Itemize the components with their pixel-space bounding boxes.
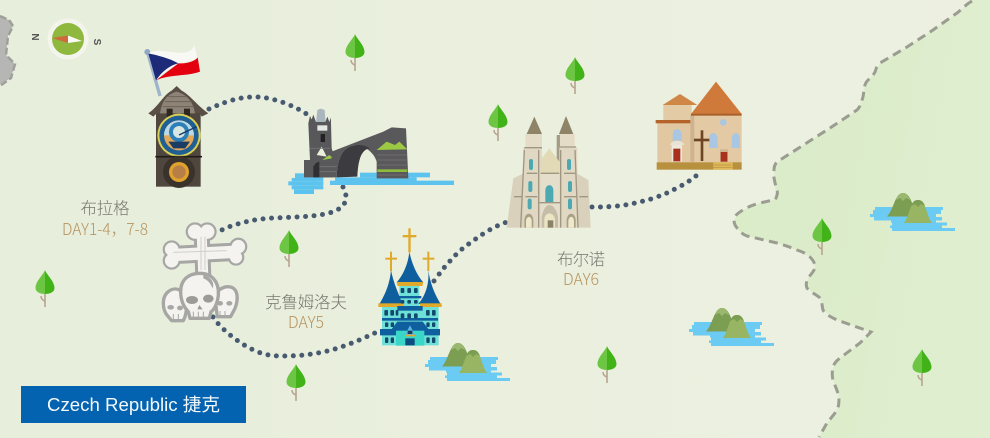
hills with lake (870, 193, 955, 231)
label: Cesky Krumlov (265, 289, 347, 333)
tree (912, 349, 932, 386)
dashed border east (734, 1, 972, 437)
neighbouring region north-west (0, 16, 15, 86)
icon: Charles Bridge (288, 109, 454, 194)
hills with lake (425, 343, 510, 381)
compass (29, 18, 102, 60)
compass: N (29, 33, 40, 41)
label: Prague (62, 195, 148, 240)
label: Prague: DAY1-4，7-8 (62, 216, 148, 240)
label: Prague: 布拉格 (80, 195, 130, 219)
icon: Brno cathedral (507, 116, 591, 228)
icon: Cesky Krumlov castle (378, 228, 442, 346)
country title badge: Czech Republic 捷克 (47, 395, 220, 415)
compass: S (91, 39, 102, 46)
tree (346, 34, 364, 71)
icon: Brno church (656, 82, 742, 170)
tree (286, 364, 306, 401)
icon: astronomical clock tower (148, 86, 208, 188)
tree (36, 270, 54, 307)
route: Prague clock to bridge (209, 97, 308, 115)
route: bridge to ossuary (218, 187, 346, 232)
label: Cesky Krumlov: DAY5 (288, 309, 324, 333)
label: Brno: DAY6 (563, 266, 599, 290)
tree (488, 104, 508, 141)
route: ossuary to Cesky Krumlov (213, 317, 375, 356)
tree (598, 346, 616, 383)
country title badge (21, 386, 246, 423)
neighbouring region east (734, 0, 990, 438)
icon: Czech flag (144, 45, 200, 96)
tree (812, 218, 832, 255)
label: Cesky Krumlov: 克鲁姆洛夫 (265, 289, 347, 313)
label: Brno: 布尔诺 (557, 246, 605, 270)
route: Brno to church (592, 176, 696, 207)
tree (280, 230, 298, 267)
label: Brno (557, 246, 605, 290)
hills with lake (689, 308, 774, 346)
icon: ossuary bones and skulls (163, 224, 246, 321)
tree (566, 57, 584, 94)
route: Cesky Krumlov to Brno (434, 222, 507, 281)
